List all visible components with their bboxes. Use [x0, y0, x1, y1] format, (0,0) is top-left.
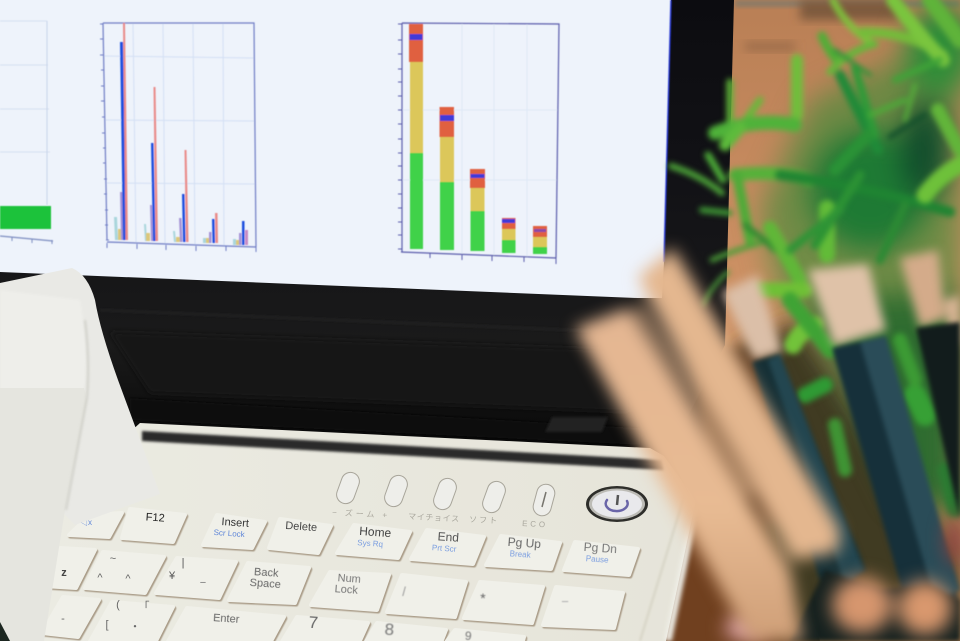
screen edge highlight — [664, 0, 671, 262]
key legends: − — [200, 577, 206, 589]
key legends: ( — [116, 599, 120, 611]
key legends: Home — [359, 524, 392, 540]
stacked bar chart — [398, 23, 559, 264]
keyboard body — [40, 423, 696, 641]
front tan pencils — [575, 248, 840, 641]
keys — [42, 509, 639, 641]
key legends: Num — [337, 572, 361, 586]
pencil butts — [725, 515, 960, 640]
stack 3 — [470, 169, 485, 251]
button labels — [332, 507, 545, 529]
key legends: ¥ — [168, 570, 176, 582]
key legends: * — [480, 590, 486, 606]
button labels: マイチョイス — [408, 512, 459, 524]
key legends: Delete — [285, 520, 317, 534]
pencil back — [638, 248, 840, 560]
partial left chart — [0, 21, 53, 244]
key legends: ◁x — [80, 518, 92, 527]
stack 1 — [409, 24, 423, 249]
bar chart: grouped bars — [100, 23, 256, 252]
key legends: Sys Rq — [357, 538, 383, 549]
key legends: ~ — [110, 553, 116, 565]
pencil bodies — [752, 322, 960, 641]
key legends: Scr Lock — [213, 528, 246, 539]
pencil tips — [722, 250, 960, 360]
key legends: Lock — [334, 583, 359, 597]
stacked chart grid — [402, 24, 558, 258]
power button — [586, 486, 648, 522]
stack 4 — [502, 218, 516, 253]
key legends: | — [182, 557, 184, 569]
wood desk background — [640, 0, 960, 641]
stack 5 — [533, 226, 547, 254]
key legends: Break — [509, 549, 532, 560]
key legends: 「 — [138, 600, 150, 613]
key legends: ^ — [125, 573, 131, 585]
leaves — [671, 0, 960, 510]
key legends: Enter — [213, 612, 240, 626]
pencil shadow between — [632, 300, 760, 505]
key legends: 7 — [308, 613, 319, 632]
media buttons — [332, 470, 557, 529]
paper sheets — [0, 268, 160, 641]
group 2 — [144, 87, 158, 241]
key legends: Pg Dn — [583, 540, 617, 556]
key legends: z — [61, 567, 67, 579]
key legends: Insert — [221, 516, 249, 530]
group 4 — [203, 213, 218, 243]
key legends: Pg Up — [507, 535, 542, 551]
key legends: Space — [249, 577, 281, 591]
key legends: / — [402, 584, 406, 599]
key legends: - — [61, 613, 65, 625]
key legends: Prt Scr — [432, 543, 457, 554]
button labels: ソフト — [469, 515, 497, 525]
key legends: [ — [105, 619, 109, 631]
group 5 — [233, 221, 248, 245]
group 3 — [173, 150, 188, 242]
screen — [0, 0, 671, 298]
laptop bezel — [0, 0, 734, 460]
key legends: End — [437, 529, 459, 545]
key legends: Pause — [586, 554, 609, 565]
key legends: ^ — [97, 572, 103, 584]
chart grid — [103, 23, 255, 246]
key legends: F12 — [145, 511, 165, 525]
key legends: − — [561, 594, 569, 609]
button labels: ECO — [522, 519, 545, 529]
key legends: Back — [254, 566, 279, 580]
button labels: − ズーム + — [332, 507, 388, 520]
pencil front — [575, 308, 803, 641]
dark wood shadow behind pencils — [700, 348, 790, 530]
stack 2 — [440, 107, 454, 250]
group 1 — [114, 23, 128, 240]
right dark pencils — [700, 250, 960, 641]
plant foliage — [671, 0, 960, 520]
key legends: 8 — [384, 620, 395, 639]
key legends — [61, 511, 617, 641]
key legends: ・ — [130, 621, 140, 633]
foliage mass — [760, 5, 960, 520]
